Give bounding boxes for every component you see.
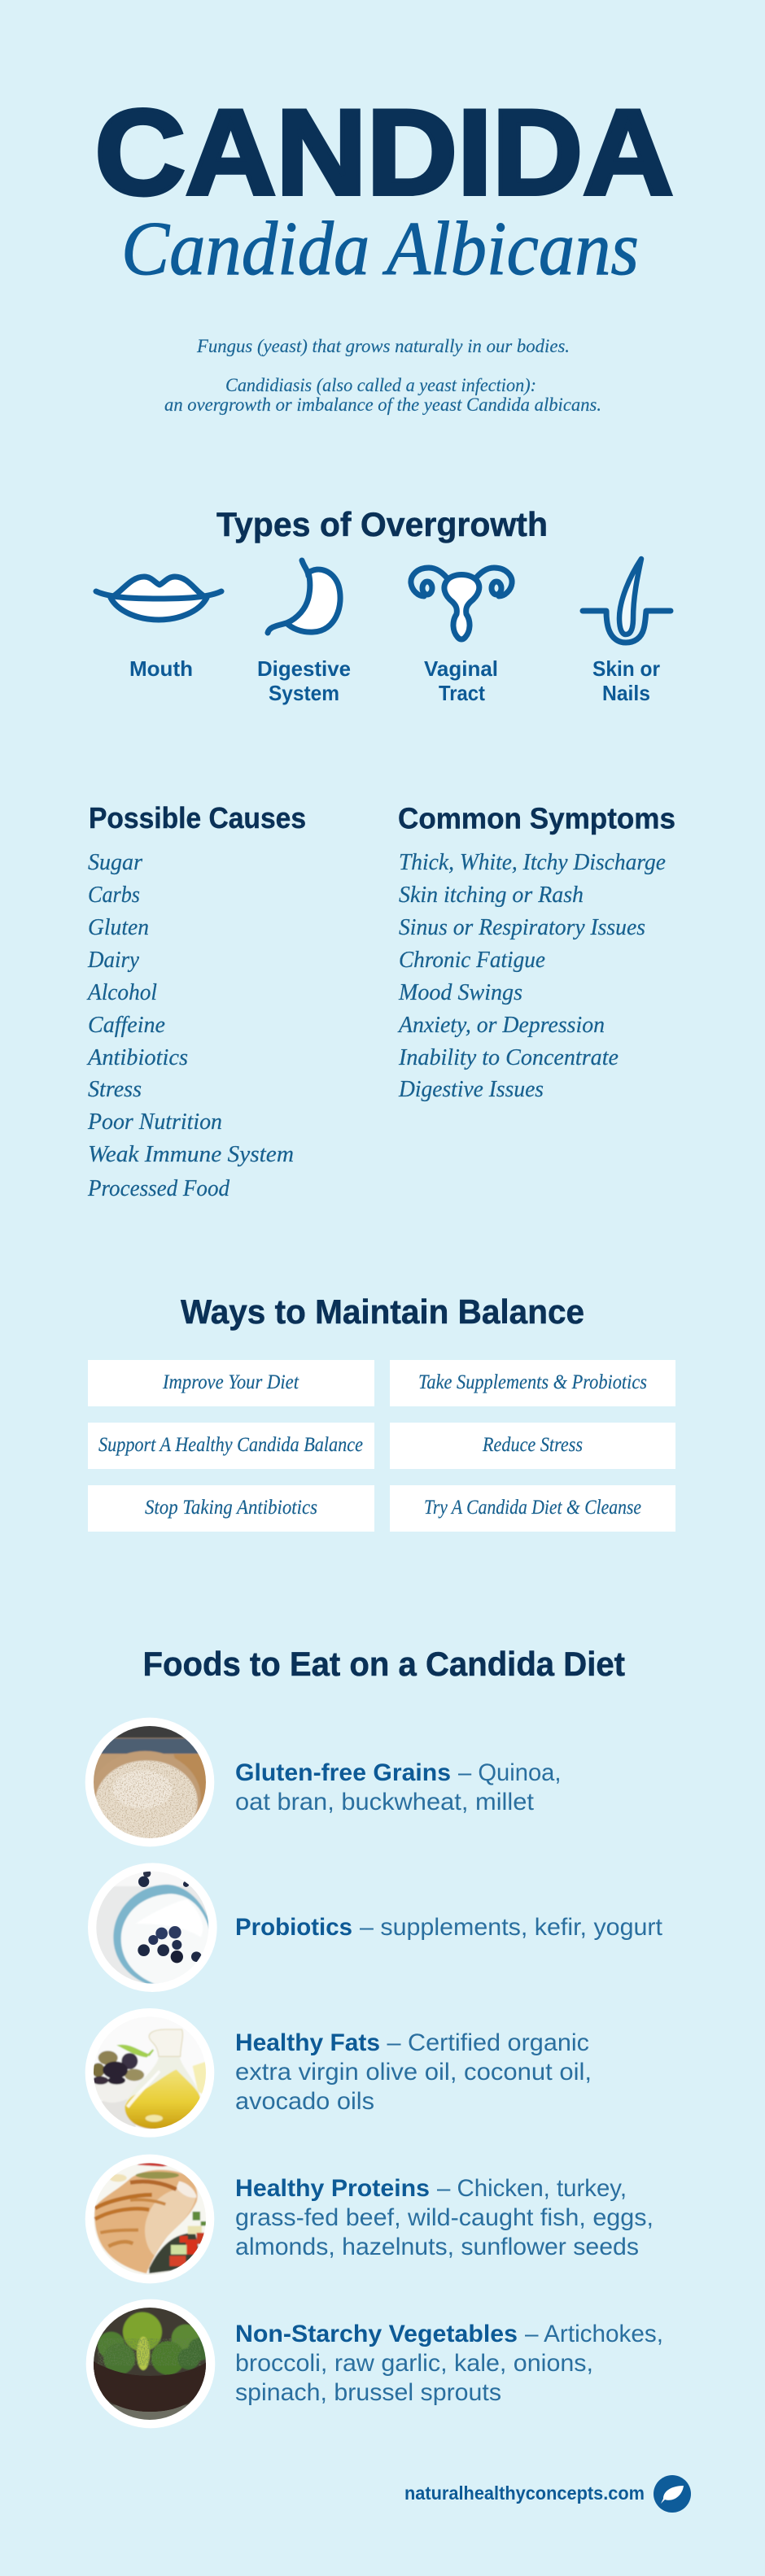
list: possible causes: Stress [88, 1076, 142, 1102]
box: improve your diet: Improve Your Diet [162, 1371, 299, 1393]
list: possible causes: Weak Immune System [88, 1141, 294, 1167]
label: vaginal tract [424, 656, 498, 705]
text: gluten-free grains: Gluten-free Grains [235, 1759, 451, 1786]
intro text [164, 336, 601, 415]
list: possible causes: Processed Food [87, 1175, 230, 1201]
list: possible causes: Antibiotics [86, 1044, 188, 1070]
text: healthy proteins: Healthy Proteins [235, 2175, 430, 2202]
text: healthy fats: extra virgin olive oil, coconut oil, [235, 2059, 592, 2086]
subtitle: Candida Albicans [121, 207, 639, 291]
text: healthy proteins [235, 2175, 654, 2260]
box: improve your diet [88, 1360, 374, 1406]
intro text: Fungus (yeast) that grows naturally in our bodies. [196, 336, 570, 356]
list: common symptoms: Sinus or Respiratory Issues [399, 914, 645, 940]
box: support a healthy candida balance [88, 1423, 374, 1469]
list: possible causes: Alcohol [86, 979, 157, 1005]
text: non-starchy vegetables: spinach, brussel sprouts [235, 2379, 501, 2406]
box: reduce stress: Reduce Stress [482, 1434, 583, 1456]
text: gluten-free grains: – Quinoa, [458, 1759, 562, 1786]
list: common symptoms: Anxiety, or Depression [397, 1012, 605, 1038]
heading: common symptoms: Common Symptoms [398, 802, 675, 835]
list: possible causes [86, 849, 294, 1201]
box: support a healthy candida balance: Support A Healthy Candida Balance [98, 1434, 363, 1456]
label: skin or nails: Nails [602, 681, 650, 705]
heading: ways to maintain balance: Ways to Maintain Balance [181, 1292, 584, 1331]
text: gluten-free grains: oat bran, buckwheat, millet [235, 1789, 535, 1815]
icon: digestive system [268, 560, 340, 633]
list: possible causes: Carbs [88, 882, 140, 908]
icon: vaginal tract [411, 568, 512, 639]
text: healthy proteins: almonds, hazelnuts, sunflower seeds [235, 2234, 639, 2260]
infographic canvas [85, 107, 691, 2513]
list: common symptoms [397, 849, 666, 1102]
list: possible causes: Gluten [88, 914, 149, 940]
box: stop taking antibiotics: Stop Taking Antibiotics [145, 1497, 317, 1519]
text: non-starchy vegetables: broccoli, raw garlic, kale, onions, [235, 2350, 593, 2377]
photo: non-starchy vegetables [86, 2299, 215, 2428]
heading: types of overgrowth: Types of Overgrowth [216, 505, 548, 543]
text: non-starchy vegetables [235, 2321, 663, 2406]
text: probiotics: – supplements, kefir, yogurt [360, 1914, 663, 1941]
label: vaginal tract: Vaginal [424, 656, 498, 681]
heading: foods to eat: Foods to Eat on a Candida Diet [143, 1645, 625, 1683]
list: possible causes: Caffeine [88, 1012, 165, 1038]
list: common symptoms: Mood Swings [398, 979, 522, 1005]
label: digestive system: Digestive [257, 656, 351, 681]
text: probiotics: Probiotics [235, 1914, 352, 1941]
text: healthy fats: Healthy Fats [235, 2029, 380, 2056]
list: possible causes: Dairy [87, 947, 139, 973]
icon: skin or nails [583, 559, 671, 643]
list: possible causes: Sugar [88, 849, 143, 875]
intro text: an overgrowth or imbalance of the yeast Candida albicans. [164, 394, 601, 415]
photo: healthy proteins [85, 2155, 214, 2283]
text: healthy fats [235, 2029, 592, 2115]
photo: grains [85, 1718, 214, 1846]
text: probiotics [235, 1914, 663, 1941]
box: take supplements and probiotics [390, 1360, 675, 1406]
heading: possible causes: Possible Causes [89, 801, 306, 835]
list: common symptoms: Chronic Fatigue [399, 947, 545, 973]
photo: probiotics [88, 1863, 217, 1992]
title: CANDIDA [94, 85, 674, 220]
text: non-starchy vegetables: Non-Starchy Vegetables [235, 2321, 518, 2347]
box: take supplements and probiotics: Take Supplements & Probiotics [418, 1371, 647, 1393]
label: vaginal tract: Tract [439, 681, 485, 705]
list: common symptoms: Inability to Concentrate [398, 1044, 619, 1070]
website url: naturalhealthyconcepts.com [404, 2482, 645, 2504]
box: try a candida diet and cleanse [390, 1485, 675, 1532]
text: healthy fats: – Certified organic [387, 2029, 589, 2056]
box: reduce stress [390, 1423, 675, 1469]
box: try a candida diet and cleanse: Try A Candida Diet & Cleanse [424, 1497, 641, 1519]
text: healthy proteins: – Chicken, turkey, [437, 2175, 627, 2202]
list: common symptoms: Thick, White, Itchy Discharge [399, 849, 666, 875]
text: non-starchy vegetables: – Artichokes, [525, 2321, 663, 2347]
icon: leaf logo [654, 2475, 691, 2513]
label: digestive system: System [269, 681, 339, 705]
list: possible causes: Poor Nutrition [87, 1109, 222, 1135]
list: common symptoms: Skin itching or Rash [399, 882, 584, 908]
label: digestive system [257, 656, 351, 705]
box: stop taking antibiotics [88, 1485, 374, 1532]
text: gluten-free grains [235, 1759, 562, 1815]
text: healthy fats: avocado oils [235, 2088, 374, 2115]
list: common symptoms: Digestive Issues [398, 1076, 544, 1102]
label: skin or nails [592, 656, 660, 705]
label: skin or nails: Skin or [592, 656, 660, 681]
intro text: Candidiasis (also called a yeast infection): [225, 375, 536, 395]
photo: healthy fats [85, 2008, 214, 2138]
text: healthy proteins: grass-fed beef, wild-caught fish, eggs, [235, 2204, 654, 2231]
label: mouth: Mouth [129, 656, 193, 681]
icon: mouth [96, 577, 221, 620]
